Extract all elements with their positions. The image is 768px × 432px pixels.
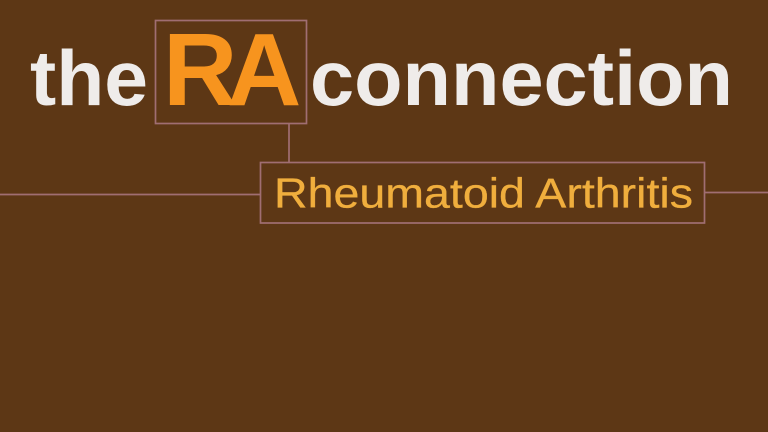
title word: the: the: [30, 34, 148, 122]
box around RA: [156, 20, 306, 124]
connector line from RA box to subtitle box: [288, 124, 290, 162]
subtitle box: [260, 162, 704, 223]
title word: connection: connection: [310, 34, 733, 122]
subtitle: Rheumatoid Arthritis: Rheumatoid Arthritis: [274, 170, 693, 216]
title abbreviation: RA: RA: [163, 12, 301, 127]
left horizontal rule: [0, 194, 260, 196]
right horizontal rule: [705, 192, 768, 194]
